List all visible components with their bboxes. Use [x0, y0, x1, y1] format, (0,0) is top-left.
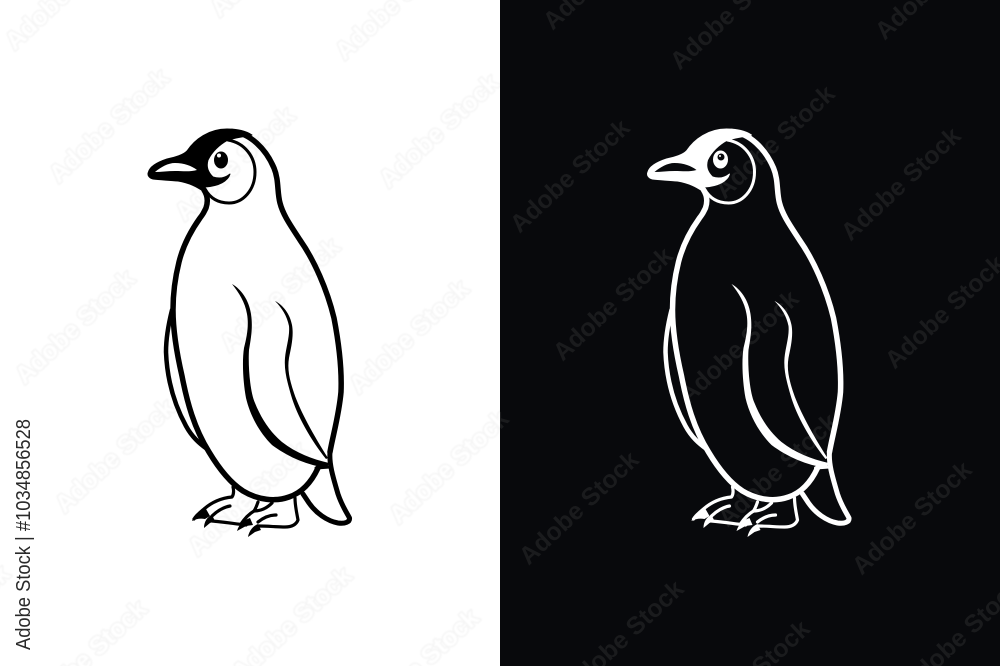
watermark: dark panel: Adobe Stock — [505, 114, 635, 238]
watermark: dark panel: Adobe Stock — [836, 122, 966, 246]
watermark: light panel: Adobe Stock — [374, 69, 504, 193]
watermark: light panel: Adobe Stock — [384, 405, 514, 529]
watermark: light panel: Adobe Stock — [215, 233, 345, 357]
watermark: dark panel: Adobe Stock — [847, 456, 977, 580]
watermark: light panel: Adobe Stock — [170, 102, 300, 226]
watermark: dark panel: Adobe Stock — [548, 242, 678, 366]
watermark: dark panel — [500, 0, 1000, 666]
watermark: dark panel: Adobe Stock — [713, 408, 843, 532]
watermark: light panel: Adobe Stock — [344, 275, 474, 399]
watermark: light panel: Adobe Stock — [50, 394, 180, 518]
watermark: light panel: Adobe Stock — [44, 64, 174, 188]
watermark: light panel: Adobe Stock — [10, 265, 140, 389]
penguin: white outline on black — [648, 129, 849, 537]
watermark: light panel: Adobe Stock — [183, 437, 313, 561]
panel: white background — [0, 0, 500, 666]
panel: black background — [500, 0, 1000, 666]
penguin: black outline on white — [148, 129, 350, 537]
watermark: dark panel: Adobe Stock — [384, 405, 514, 529]
stock id label: Adobe Stock | #1034856528 — [13, 419, 35, 650]
watermark: dark panel: Adobe Stock — [514, 446, 644, 570]
watermark: light panel — [0, 0, 514, 666]
watermark: dark panel: Adobe Stock — [710, 80, 840, 204]
watermark: dark panel: Adobe Stock — [674, 285, 804, 409]
